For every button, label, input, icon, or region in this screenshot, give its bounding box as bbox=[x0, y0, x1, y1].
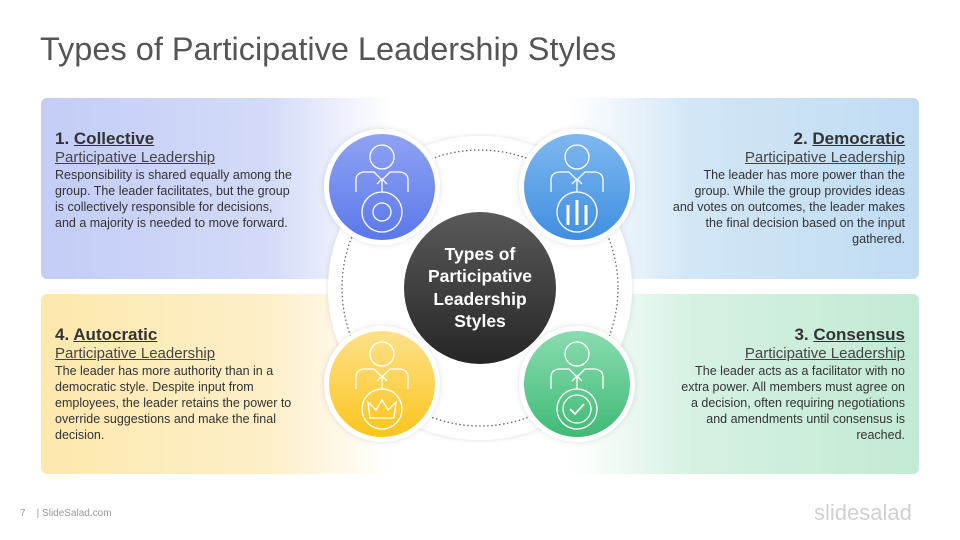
text: autocratic: 4. Autocratic bbox=[55, 325, 157, 344]
text: democratic: Participative Leadership bbox=[745, 149, 905, 166]
icon: consensus bbox=[519, 326, 635, 442]
logo: slidesalad bbox=[814, 500, 912, 525]
text: consensus: Participative Leadership bbox=[745, 345, 905, 362]
text: consensus: 3. Consensus bbox=[794, 325, 905, 344]
big white circle bbox=[328, 136, 632, 440]
text: collective bbox=[55, 129, 292, 230]
text: democratic bbox=[673, 129, 905, 246]
text: collective: Participative Leadership bbox=[55, 149, 215, 166]
icon: democratic bbox=[519, 129, 635, 245]
center circle bbox=[404, 212, 556, 364]
panel: consensus bbox=[570, 294, 919, 474]
text: collective: Responsibility is shared equally among the group. The leader facilitates, but the group is collectively responsible for decisions, and a majority is needed to move forward. bbox=[55, 168, 292, 230]
center circle: Types of bbox=[445, 244, 515, 264]
title: Types of Participative Leadership Styles bbox=[40, 31, 616, 67]
footer: 7 | SlideSalad.com bbox=[20, 508, 112, 519]
text: democratic: The leader has more power than the group. While the group provides ideas and votes on outcomes, the leader makes the final decision based on the input gathered. bbox=[673, 168, 905, 246]
text: consensus: The leader acts as a facilitator with no extra power. All members must agree on a decision, often requiring negotiations and amendments until consensus is reached. bbox=[681, 364, 905, 442]
panel: democratic bbox=[570, 98, 919, 279]
icon: collective bbox=[324, 129, 440, 245]
center circle: Styles bbox=[454, 311, 506, 331]
icon: autocratic bbox=[324, 326, 440, 442]
center circle: Leadership bbox=[433, 289, 527, 309]
panel: collective bbox=[41, 98, 391, 279]
panel: autocratic bbox=[41, 294, 391, 474]
text: democratic: 2. Democratic bbox=[793, 129, 905, 148]
center circle: Participative bbox=[428, 266, 532, 286]
text: autocratic: Participative Leadership bbox=[55, 345, 215, 362]
text: autocratic: The leader has more authority than in a democratic style. Despite input from employees, the leader retains the power to override suggestions and make the final decision. bbox=[55, 364, 291, 442]
text: consensus bbox=[681, 325, 905, 442]
text: autocratic bbox=[55, 325, 291, 442]
text: collective: 1. Collective bbox=[55, 129, 154, 148]
